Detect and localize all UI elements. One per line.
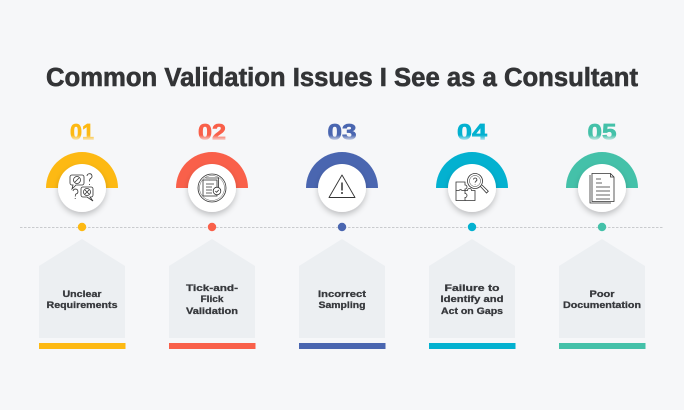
card 5: Documentation bbox=[563, 300, 641, 311]
step 05: Poor Documentation bbox=[566, 120, 638, 212]
semicircle 05 bbox=[566, 152, 638, 188]
card 2: Tick-and- bbox=[186, 283, 238, 294]
semicircle 04 bbox=[436, 152, 508, 188]
card 4: Failure to bbox=[444, 283, 500, 294]
step 01: Unclear Requirements bbox=[46, 120, 118, 212]
card 2: Flick bbox=[200, 294, 224, 305]
icon circle 02 bbox=[188, 164, 236, 212]
card 1 bbox=[39, 239, 126, 349]
card 2: Validation bbox=[186, 306, 238, 317]
icon circle 01 bbox=[58, 164, 106, 212]
step 03: Incorrect Sampling bbox=[306, 120, 378, 212]
card 3 bbox=[299, 239, 386, 349]
timeline dots bbox=[78, 223, 606, 231]
card 4: Identify and bbox=[440, 294, 504, 305]
icon: checked document bbox=[198, 174, 226, 202]
icon circle 05 bbox=[578, 164, 626, 212]
card 5 bbox=[559, 239, 646, 349]
icon: documents bbox=[590, 174, 614, 203]
icon circle 04 bbox=[448, 164, 496, 212]
number 05: 05 bbox=[588, 120, 616, 144]
icon: warning triangle bbox=[329, 175, 355, 198]
number 02: 02 bbox=[198, 120, 226, 144]
icon: puzzle and magnifier bbox=[456, 174, 488, 200]
number 04: 04 bbox=[457, 120, 488, 144]
card 4: Act on Gaps bbox=[441, 306, 503, 317]
card 2 bbox=[169, 239, 256, 349]
card 3: Incorrect bbox=[318, 289, 367, 300]
icon circle 03 bbox=[318, 164, 366, 212]
card 1: Requirements bbox=[46, 300, 118, 311]
card 3: Sampling bbox=[318, 300, 366, 311]
number 03: 03 bbox=[328, 120, 356, 144]
step 02: Tick-and-Flick Validation bbox=[176, 120, 248, 212]
semicircle 01 bbox=[46, 152, 118, 188]
number 01: 01 bbox=[70, 120, 94, 144]
semicircle 02 bbox=[176, 152, 248, 188]
card 1: Unclear bbox=[62, 289, 102, 300]
step 04: Failure to Identify and Act on Gaps bbox=[436, 120, 508, 212]
card 4 bbox=[429, 239, 516, 349]
icon: speech bubbles and question marks bbox=[70, 174, 93, 201]
card 5: Poor bbox=[590, 289, 615, 300]
title: Common Validation Issues I See as a Consultant bbox=[46, 64, 639, 92]
semicircle 03 bbox=[306, 152, 378, 188]
